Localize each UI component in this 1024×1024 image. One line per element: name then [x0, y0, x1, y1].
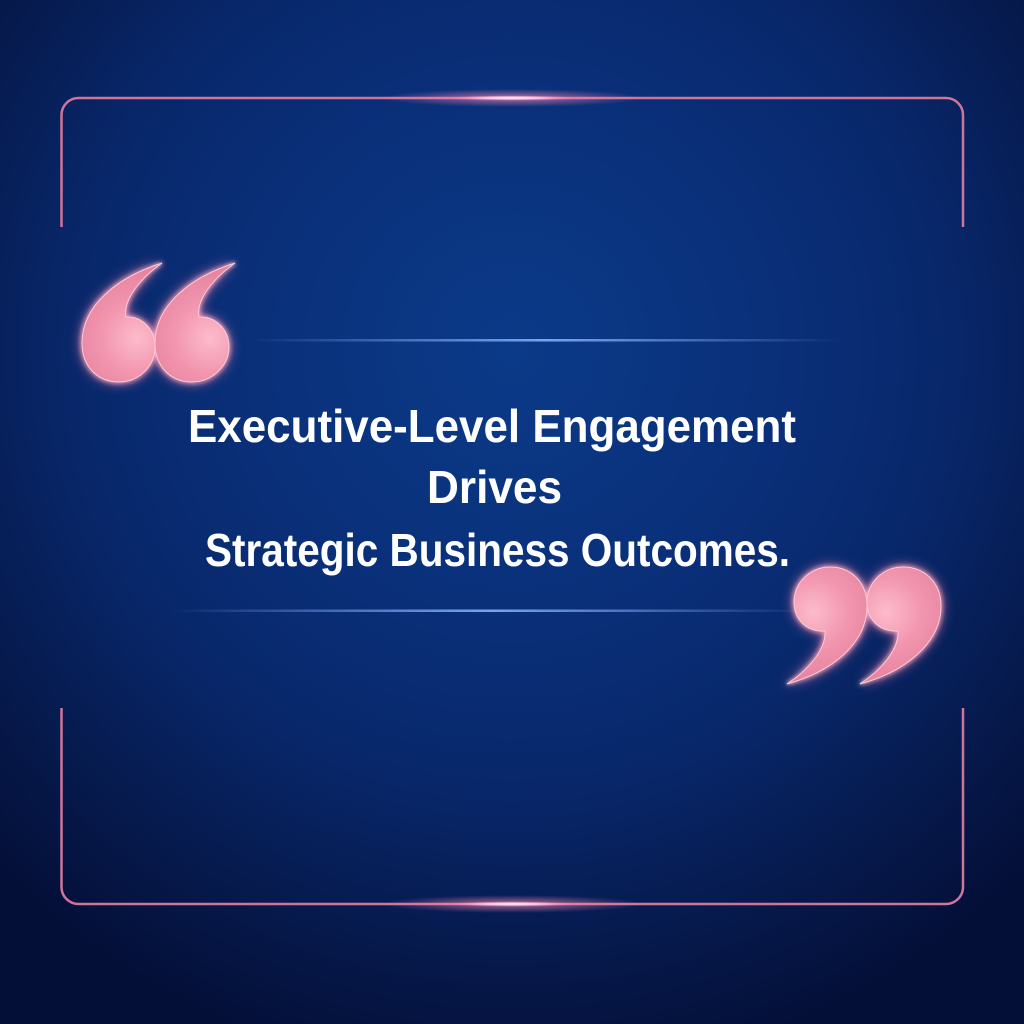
divider: lower line [170, 610, 810, 612]
frame: top bracket [62, 89, 963, 227]
quote text: Strategic Business Outcomes. [205, 524, 790, 576]
quote text: Executive-Level Engagement [188, 400, 796, 452]
quote text: Drives [427, 461, 562, 513]
icon: closing quotation mark [787, 567, 941, 684]
icon: opening quotation mark [82, 263, 235, 382]
quote text [188, 400, 796, 576]
frame: bottom bracket [62, 708, 963, 913]
divider: upper line [250, 339, 840, 342]
